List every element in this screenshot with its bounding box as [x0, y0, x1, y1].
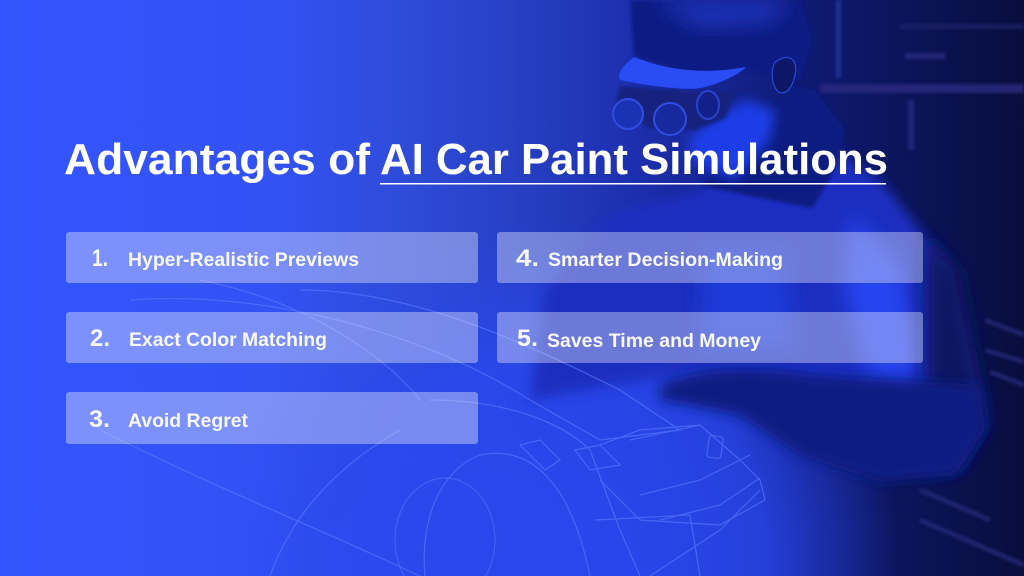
list item 3: 3. [89, 406, 110, 433]
list item 2: Exact Color Matching [129, 330, 327, 351]
list item 1: Hyper-Realistic Previews [128, 250, 359, 271]
list item 1: 1. [92, 245, 108, 272]
car wireframe [100, 280, 765, 576]
list item 4: 4. [516, 245, 539, 272]
list item 2 [66, 312, 478, 363]
list item 3 [66, 392, 478, 444]
workshop background bars [820, 0, 1024, 565]
title [64, 135, 888, 184]
list item 1 [66, 232, 478, 283]
hat [630, 0, 812, 80]
lower wash blue [200, 200, 920, 576]
visor [619, 57, 746, 89]
jacket highlights [845, 215, 918, 380]
list item 5: Saves Time and Money [547, 331, 761, 352]
shoulder shade [925, 230, 990, 470]
title: Advantages of [64, 135, 370, 184]
list item 5: 5. [517, 325, 538, 352]
goggles [613, 86, 735, 135]
neck [690, 100, 775, 180]
list item 4 [497, 232, 923, 283]
list item 5 [497, 312, 923, 363]
title: AI Car Paint Simulations [380, 135, 888, 184]
ear [772, 58, 796, 93]
dark hand and sleeve [660, 370, 985, 482]
jacket [530, 125, 985, 470]
list item 2: 2. [90, 325, 110, 352]
list item 4: Smarter Decision-Making [548, 250, 783, 271]
list item 3: Avoid Regret [128, 411, 249, 432]
collar [700, 85, 845, 208]
